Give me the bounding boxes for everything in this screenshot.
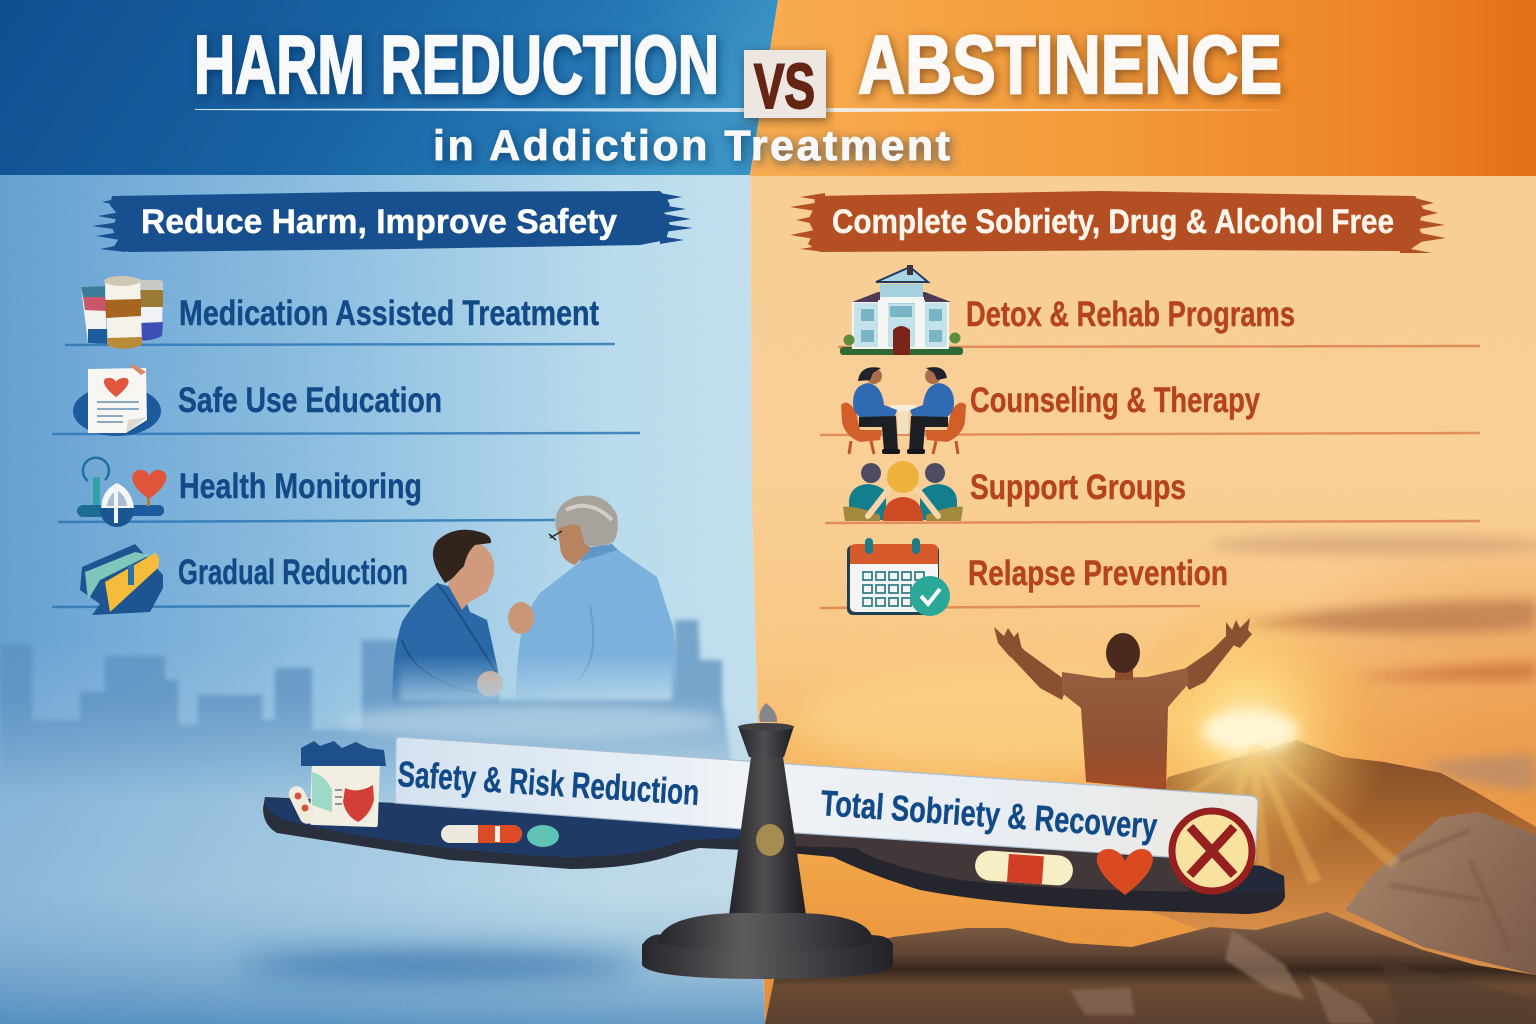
illustration: person with raised arms	[994, 618, 1252, 790]
item: detox and rehab programs: Detox & Rehab Programs	[966, 295, 1295, 334]
vs badge: VS	[754, 52, 815, 122]
icon: health monitoring	[77, 458, 166, 527]
title	[194, 18, 1287, 170]
item: health monitoring: Health Monitoring	[179, 467, 422, 506]
panel label: total sobriety and recovery: Total Sobriety & Recovery	[819, 782, 1158, 846]
icon: rehab building	[840, 265, 963, 355]
item: gradual reduction: Gradual Reduction	[178, 553, 408, 592]
illustration: background mountains	[765, 740, 1536, 1024]
item: support groups: Support Groups	[970, 468, 1186, 507]
man	[508, 495, 682, 710]
woman	[392, 530, 503, 710]
right brush banner: Complete Sobriety, Drug & Alcohol Free	[832, 203, 1394, 241]
rock cliff	[1345, 812, 1536, 975]
right pan	[790, 832, 1285, 914]
title: harm reduction: HARM REDUCTION	[194, 18, 719, 111]
person left	[841, 367, 900, 454]
icon: gradual reduction folder	[80, 544, 163, 615]
left list dividers	[52, 344, 640, 607]
scale base	[642, 913, 893, 979]
illustration: conversation of two people	[392, 495, 682, 710]
icon: heart	[1097, 849, 1153, 895]
item: counseling and therapy: Counseling & Therapy	[970, 381, 1260, 420]
right brush banner	[790, 191, 1446, 253]
left pan	[263, 797, 745, 869]
left brush banner	[92, 191, 693, 252]
arms and hands	[994, 618, 1252, 700]
balance scale	[263, 703, 1285, 979]
icon: medication bottles	[81, 276, 163, 349]
header band left	[0, 0, 778, 175]
illustration: sun glow	[1110, 590, 1400, 884]
icon: capsule	[974, 850, 1074, 886]
left panel background	[0, 175, 765, 1024]
city skyline	[0, 618, 732, 785]
item: relapse prevention: Relapse Prevention	[968, 554, 1228, 593]
foreground ridge	[765, 912, 1536, 1024]
icon: capsule and pill	[441, 825, 559, 847]
icon: prohibition cross	[1172, 811, 1252, 891]
list items left	[178, 294, 599, 592]
subtitle: in Addiction Treatment	[433, 122, 950, 170]
right panel background	[750, 175, 1536, 1024]
icon: calendar with check	[847, 538, 950, 616]
panel label: safety and risk reduction: Safety & Risk Reduction	[396, 753, 700, 813]
list items right	[966, 295, 1295, 593]
item: safe use education: Safe Use Education	[178, 381, 442, 420]
item: medication assisted treatment: Medication Assisted Treatment	[179, 294, 599, 333]
icon: support group	[843, 461, 963, 521]
left brush banner: Reduce Harm, Improve Safety	[141, 203, 617, 241]
title: abstinence: ABSTINENCE	[858, 18, 1282, 111]
fog under people	[340, 704, 720, 740]
scale shadow on ground	[240, 954, 640, 976]
cloud bands	[1210, 535, 1536, 790]
scale column	[729, 703, 806, 915]
header band right	[750, 0, 1536, 176]
text panel	[395, 737, 1258, 860]
icon: counseling	[841, 367, 966, 454]
right list dividers	[820, 346, 1480, 608]
icon: safe use document	[73, 365, 161, 436]
person right	[907, 367, 966, 454]
icon: safety calendar with shield	[286, 741, 386, 827]
sun rays	[1180, 743, 1400, 884]
